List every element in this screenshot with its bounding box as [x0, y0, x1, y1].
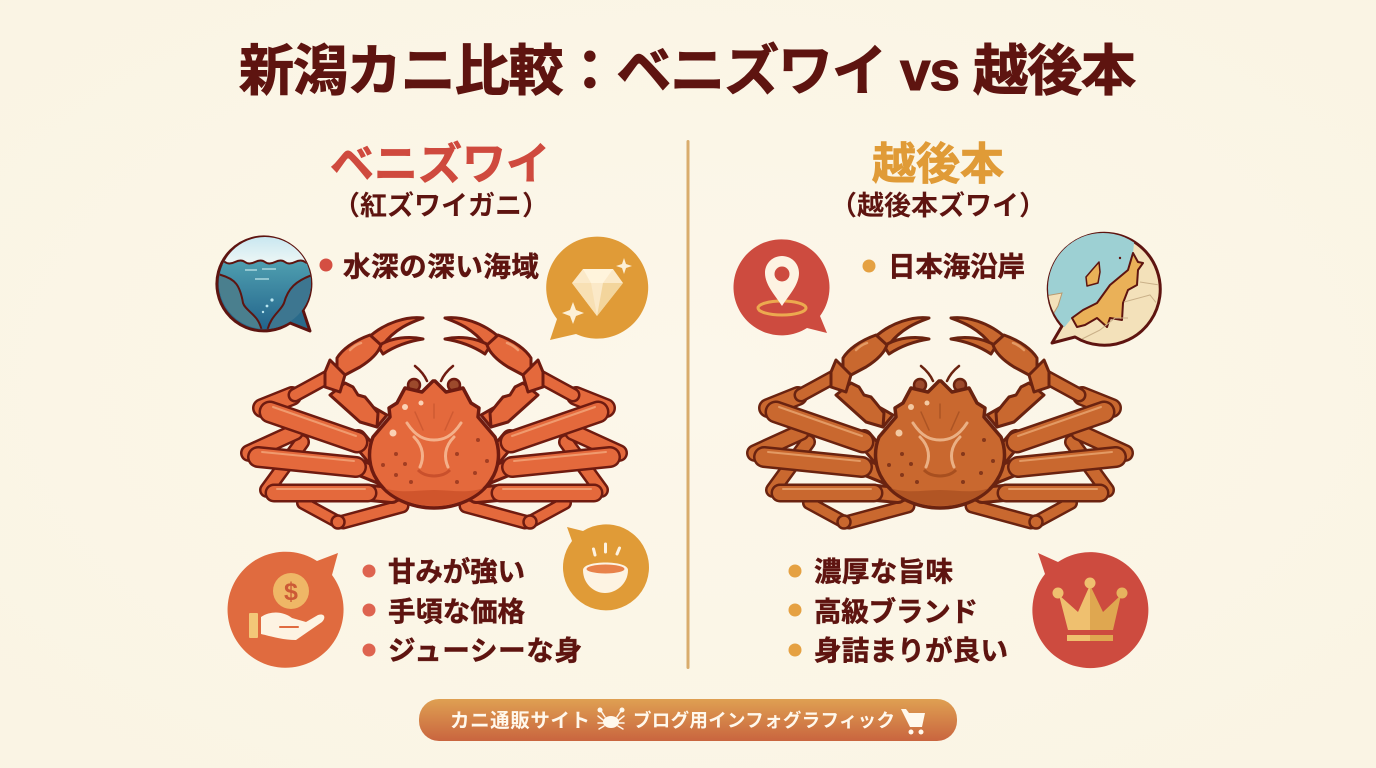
heading: 越後本: 越後本	[872, 140, 1004, 189]
bullet list: 越後本: 身詰まりが良い	[814, 635, 1008, 666]
bullet list: 越後本: 濃厚な旨味	[814, 556, 953, 587]
panel: ベニズワイ	[210, 140, 649, 668]
icon: price hand bubble: $	[284, 578, 298, 606]
bullet list: ベニズワイ: 甘みが強い	[388, 556, 525, 587]
icon: shopping cart	[901, 709, 925, 734]
bullet list: ベニズワイ	[362, 556, 582, 666]
subheading: （越後本ズワイ）	[830, 190, 1046, 221]
bullet: 日本海沿岸: 日本海沿岸	[888, 251, 1025, 282]
crab: ベニズワイ	[249, 318, 619, 528]
subheading: （紅ズワイガニ）	[333, 190, 549, 221]
icon: small crab	[598, 708, 624, 729]
bullet list: 越後本: 高級ブランド	[814, 596, 978, 627]
icon: location pin bubble	[734, 239, 830, 335]
icon: price hand bubble	[228, 552, 344, 668]
divider	[686, 140, 690, 669]
heading: ベニズワイ: ベニズワイ	[330, 140, 550, 189]
icon: diamond bubble	[546, 237, 648, 340]
title: 新潟カニ比較：ベニズワイ vs 越後本	[239, 40, 1136, 102]
bullet: 水深の深い海域: 水深の深い海域	[343, 251, 539, 282]
bullet list: 越後本	[788, 556, 1008, 666]
footer text right: ブログ用インフォグラフィック	[633, 710, 895, 731]
crab: 越後本	[755, 318, 1125, 528]
footer banner	[419, 699, 957, 741]
panel: 越後本	[734, 140, 1160, 668]
icon: Niigata map bubble	[1040, 225, 1160, 345]
footer text left: カニ通販サイト	[450, 710, 590, 732]
icon: bowl bubble	[563, 524, 649, 610]
bullet list: ベニズワイ: 手頃な価格	[388, 596, 526, 627]
icon: crown bubble	[1032, 552, 1148, 668]
icon: deep ocean bubble	[215, 235, 312, 332]
bullet list: ベニズワイ: ジューシーな身	[388, 635, 582, 666]
